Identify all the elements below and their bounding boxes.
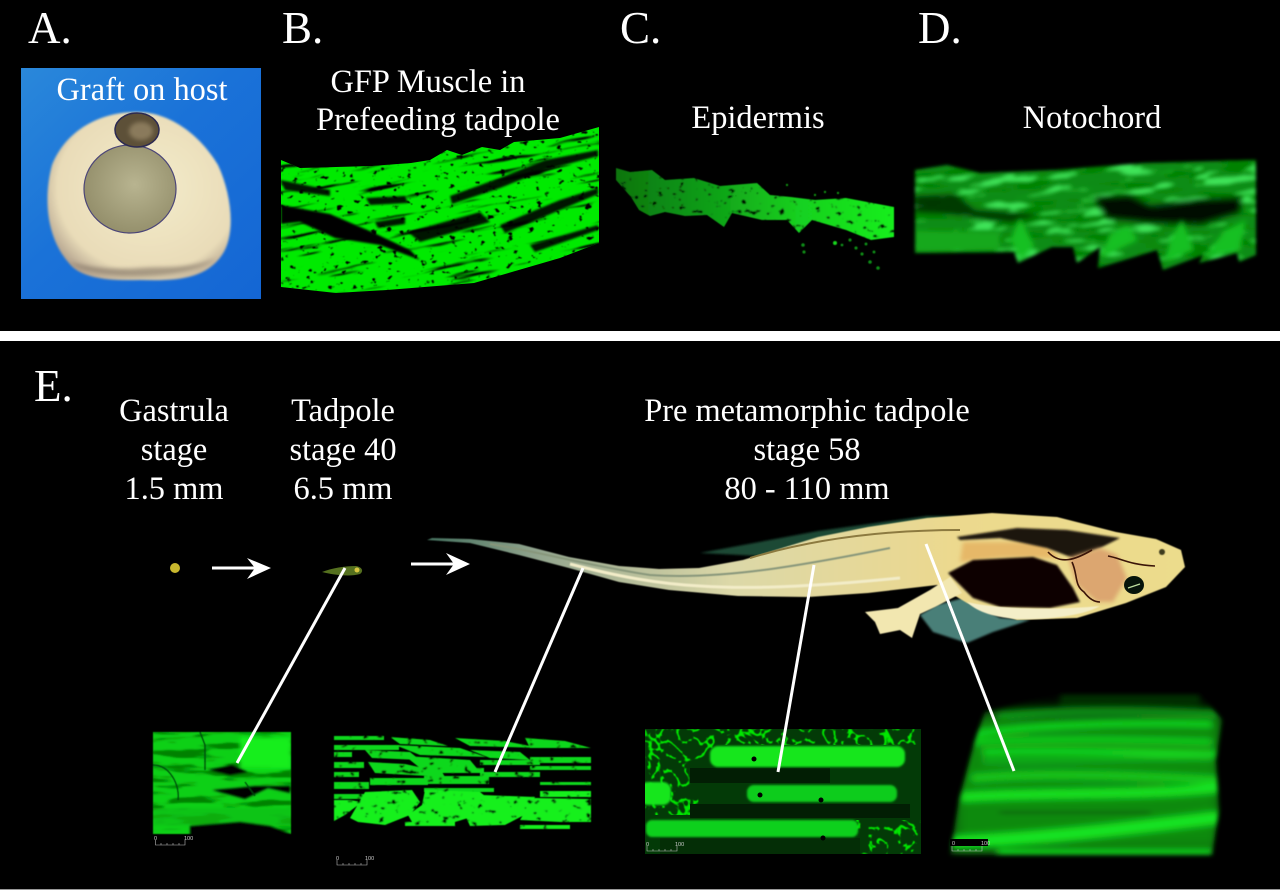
gut [948,557,1080,608]
metamorphic tadpole photograph [427,513,1185,643]
panel A: graft on host photo [21,68,261,299]
pointer line: stage 40 to micrograph [237,568,345,763]
caption: gastrula stage: stage [141,432,207,468]
tail stripes [490,544,900,587]
scale bar: 0 [646,842,649,848]
scale bar: 0 [336,856,339,862]
scale bar [336,856,374,865]
scale bar: 100 [184,836,193,842]
panel label E: E. [34,361,73,411]
scale bar: 100 [365,856,374,862]
caption: Prefeeding tadpole: Prefeeding tadpole [316,102,560,138]
scale bar: 0 [952,841,955,847]
tan trunk [960,542,1060,562]
caption: tadpole stage 40: 6.5 mm [294,471,392,507]
arrow: tadpole to metamorphic [411,553,470,575]
panel label D: D. [918,3,962,53]
divider band [0,331,1280,341]
pointer line: anterior trunk to micrograph [926,544,1014,771]
panel E1: tadpole muscle micrograph [153,732,291,845]
panel D: notochord [912,105,1258,272]
panel label B: B. [282,3,323,53]
icon: stage 40 tadpole [322,566,362,575]
dark dorsal band [957,528,1120,558]
caption: gastrula stage [119,393,229,507]
caption: tadpole stage 40: Tadpole [291,393,395,429]
caption: graft on host: Graft on host [57,72,227,108]
scale bar [950,839,990,851]
caption: tadpole stage 40: stage 40 [289,432,397,468]
caption: Notochord: Notochord [1023,100,1161,136]
lower fin [920,598,1030,643]
nostril [1159,549,1165,555]
scale bar [646,842,684,851]
panel E4: metamorphic trunk muscle micrograph [950,694,1225,855]
scale bar: 100 [675,842,684,848]
scale bar [154,836,193,845]
panel B: GFP muscle in prefeeding tadpole [281,69,599,293]
caption: pre metamorphic tadpole: Pre metamorphic tadpole [644,393,970,429]
scale bar: 100 [981,841,990,847]
icon: gastrula embryo [170,563,180,573]
panel label C: C. [620,3,661,53]
orange head area [1068,548,1127,602]
caption: gastrula stage: Gastrula [119,393,229,429]
caption: gastrula stage: 1.5 mm [125,471,223,507]
caption: tadpole stage 40 [289,393,397,507]
caption: GFP Muscle in: GFP Muscle in [331,64,525,100]
scale bar: 0 [154,836,157,842]
caption: pre metamorphic tadpole [644,393,970,507]
panel C: epidermis [610,100,900,270]
dorsal stripe [750,530,960,558]
belly band [967,602,1100,619]
caption: Epidermis: Epidermis [691,100,825,136]
caption: pre metamorphic tadpole: stage 58 [753,432,861,468]
panel label A: A. [28,3,72,53]
body and tail [427,513,1185,620]
dark vessels [1048,550,1155,602]
caption: pre metamorphic tadpole: 80 - 110 mm [724,471,890,507]
eye [1124,576,1144,594]
panel E2: tadpole tail muscle micrograph [334,733,591,865]
panel E3: metamorphic tail muscle micrograph [640,729,921,854]
arrow: gastrula to tadpole [212,558,271,579]
pointer line: mid trunk to micrograph [778,565,814,772]
dorsal fin [700,516,960,556]
pointer line: tail to micrograph [495,568,583,772]
hind limb [865,577,962,638]
